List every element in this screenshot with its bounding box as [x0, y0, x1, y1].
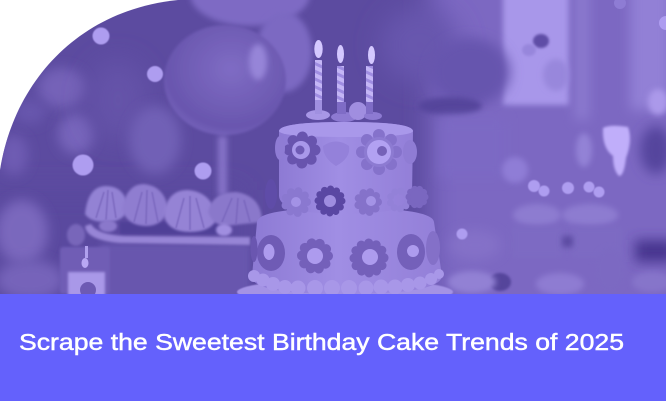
candles — [314, 40, 375, 102]
bottom tier flowers — [250, 231, 440, 273]
balloons — [164, 0, 312, 196]
bokeh lights — [72, 0, 666, 240]
cake board — [236, 284, 454, 294]
middle row flowers — [265, 179, 425, 213]
cake topper base — [306, 100, 382, 122]
top tier — [279, 122, 413, 214]
title: Scrape the Sweetest Birthday Cake Trends of 2025 — [19, 329, 624, 355]
bottom tier — [252, 208, 442, 294]
candle jar — [60, 224, 110, 298]
photo background — [0, 0, 450, 288]
small background cakes, right — [448, 204, 666, 295]
layered cake — [237, 40, 453, 305]
top tier flowers — [275, 135, 417, 169]
blurred background tones — [0, 0, 666, 294]
photo panel: birthday cake scene — [0, 0, 666, 294]
window and flowers, right side — [418, 0, 666, 262]
pearl border — [248, 269, 444, 296]
title band — [0, 294, 666, 401]
cupcakes on a tray — [85, 184, 262, 304]
